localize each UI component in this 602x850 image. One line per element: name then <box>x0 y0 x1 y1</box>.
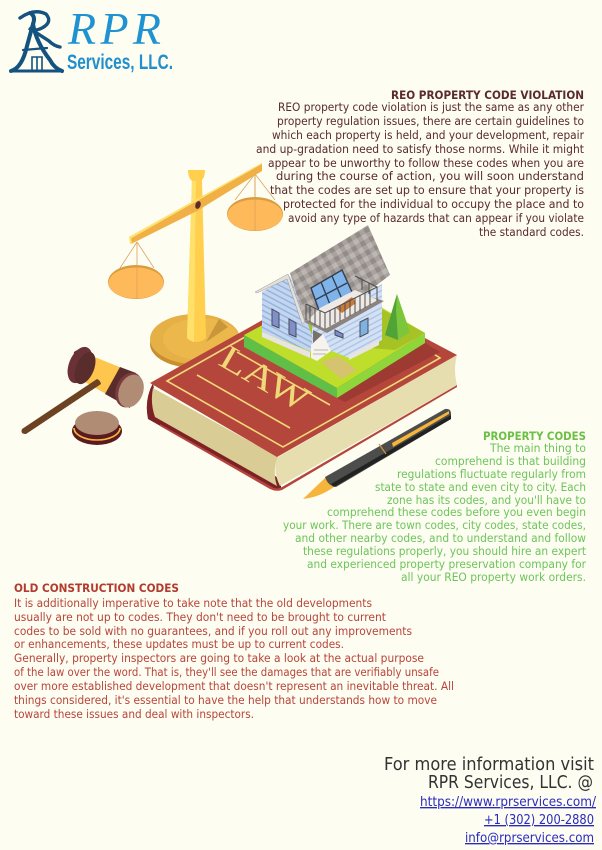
icon: house monogram <box>11 12 62 71</box>
roof <box>290 225 390 325</box>
text block: old construction codes: usually are not up to codes. They don't need to be brought to current <box>14 610 386 624</box>
gavel sound block <box>72 411 122 445</box>
text block: property codes: all your REO property work orders. <box>401 570 586 584</box>
illustration: scales of justice <box>108 163 283 368</box>
footer: contact information <box>384 754 596 846</box>
book title: LAW: LAW <box>213 337 317 419</box>
text block: property codes: The main thing to <box>489 441 586 455</box>
pen barrel <box>325 409 451 487</box>
balcony <box>305 276 384 333</box>
platform right side <box>337 333 425 398</box>
illustration: fountain pen <box>303 409 451 499</box>
pen nib <box>303 478 334 499</box>
text block: old construction codes: Generally, property inspectors are going to take a look at the actual purpose <box>14 651 424 665</box>
house left wall <box>262 276 312 352</box>
book bottom cover <box>160 385 457 491</box>
tree <box>385 294 410 340</box>
platform top <box>244 283 425 388</box>
logo wordmark: Services, LLC. <box>67 51 173 74</box>
platform shadow <box>337 343 440 402</box>
gavel head <box>63 343 148 412</box>
text block: REO property code violation: that the codes are set up to ensure that your property is <box>270 183 584 197</box>
illustration: gavel <box>22 343 148 445</box>
text block: old construction codes: codes to be sold with no guarantees, and if you roll out any improvements <box>14 624 412 638</box>
illustration: law book <box>147 285 457 491</box>
house right wall <box>312 284 382 358</box>
book cover <box>150 285 457 457</box>
text block: old construction codes: over more established development that doesn't represent an inevitable threat. All <box>14 679 454 693</box>
scale base <box>150 314 240 368</box>
text block: property codes <box>283 441 586 584</box>
balcony floor <box>308 290 378 329</box>
scale pole <box>187 170 206 342</box>
pen clip <box>392 411 449 447</box>
logo wordmark: RPR <box>67 3 161 54</box>
illustration: house on green platform <box>244 225 440 402</box>
balcony railing <box>306 276 377 329</box>
scale beam <box>129 163 262 244</box>
book pages left <box>152 388 278 486</box>
logo: RPR Services, LLC. <box>11 3 173 74</box>
text block: old construction codes: It is additionally imperative to take note that the old developments <box>14 596 372 610</box>
text block: old construction codes: things considered, it's essential to have the help that understands how to move <box>14 693 437 707</box>
balcony floor edge <box>305 292 384 333</box>
heading: property codes: PROPERTY CODES <box>483 429 586 443</box>
platform left side <box>244 335 337 398</box>
door recess <box>313 330 323 350</box>
heading: old construction codes: OLD CONSTRUCTION CODES <box>14 581 179 595</box>
steps <box>311 334 331 361</box>
heading: REO property code violation: REO PROPERTY CODE VIOLATION <box>391 88 584 102</box>
right pan <box>227 174 283 231</box>
gavel handle <box>22 379 101 434</box>
windows <box>272 309 368 338</box>
path <box>321 356 357 379</box>
text block: REO property code violation: the standard codes. <box>479 225 584 239</box>
text block: REO property code violation <box>256 100 584 239</box>
text block: old construction codes: of the law over the word. That is, they'll see the damages that are verifiably unsafe <box>14 665 439 679</box>
text block: old construction codes: or enhancements, these updates must be up to current codes. <box>14 637 344 651</box>
cover frame <box>167 337 440 447</box>
text block: REO property code violation: protected for the individual to occupy the place and to <box>283 197 584 211</box>
text block: old construction codes <box>14 596 454 721</box>
logo wordmark <box>67 3 173 74</box>
cover lines <box>197 352 330 428</box>
book spine <box>147 383 281 490</box>
text block: property codes: comprehend is that building <box>435 454 586 468</box>
skylight windows <box>311 270 352 313</box>
text block: old construction codes: toward these issues and deal with inspectors. <box>14 707 254 721</box>
text block: REO property code violation: during the course of action, you will soon understand <box>276 169 584 183</box>
text block: property codes: regulations fluctuate regularly from <box>397 467 586 481</box>
book pages right <box>275 355 457 486</box>
left pan <box>108 242 164 299</box>
